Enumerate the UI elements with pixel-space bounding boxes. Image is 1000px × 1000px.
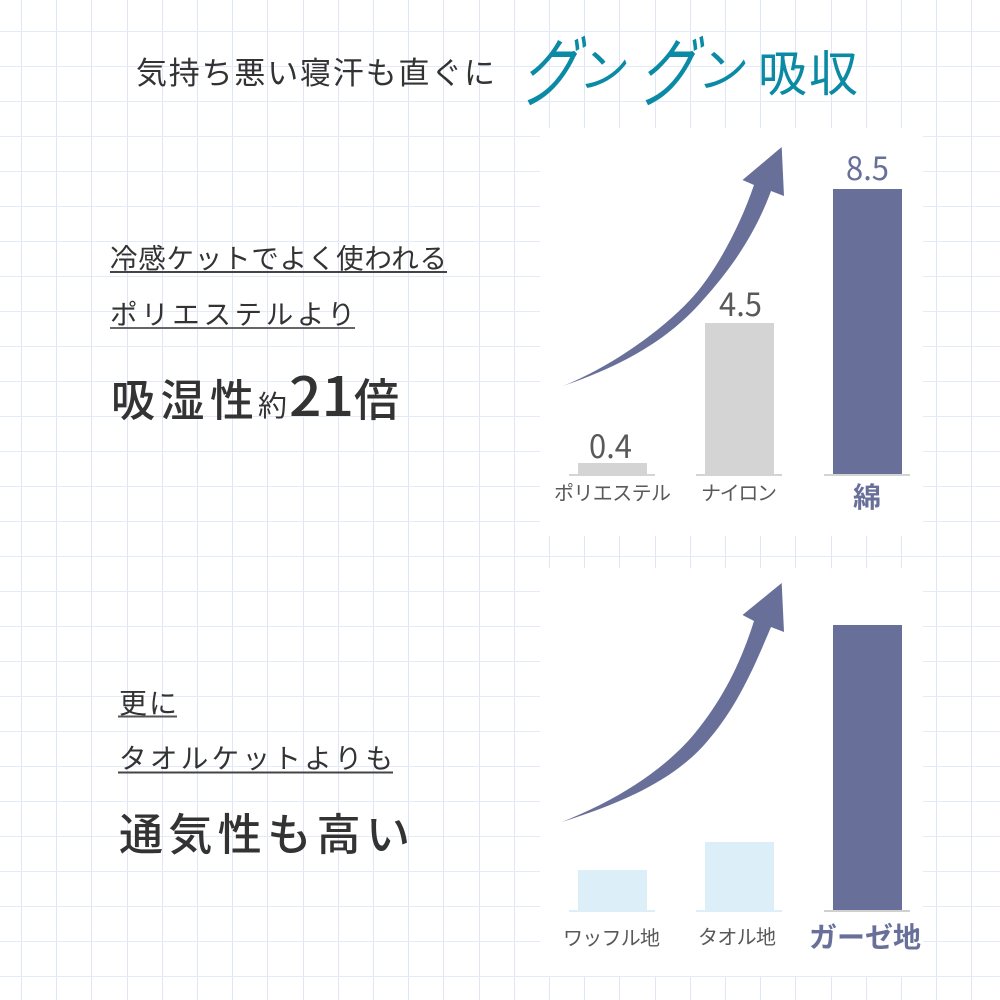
bar: ナイロン 4.5: ナイロン (701, 477, 777, 506)
title emphasis: グングン吸収: グ (631, 11, 716, 123)
bar: ナイロン 4.5: 4.5 (719, 280, 762, 326)
title emphasis: グングン吸収: 吸収 (758, 35, 858, 106)
title emphasis: グングン吸収 (513, 11, 858, 123)
headline: 吸湿性約21倍: 吸湿性 (111, 365, 254, 429)
bar: 綿 8.5 (824, 144, 910, 516)
panel: breathability chart (540, 568, 923, 976)
text block: breathability (118, 682, 410, 863)
bar: ポリエステル 0.4: 0.4 (589, 422, 632, 468)
bar: ポリエステル 0.4 (554, 422, 671, 506)
headline: 吸湿性約21倍: 21 (289, 353, 354, 432)
bar: ガーゼ地 (809, 625, 921, 956)
line: 冷感ケットでよく使われる: 冷感ケットでよく使われる (110, 236, 447, 276)
line: タオルケットよりも: タオルケットよりも (119, 736, 393, 776)
title (136, 11, 858, 123)
headline: 通気性も高い: 通気性も高い (119, 799, 410, 863)
headline: 吸湿性約21倍: 倍 (354, 364, 399, 429)
arrow: rising curve (563, 147, 784, 386)
bar: ナイロン 4.5 (696, 280, 782, 506)
bar: ワッフル地 (563, 870, 660, 951)
bar: タオル地 (696, 842, 782, 950)
text block: moisture absorption (110, 236, 447, 432)
arrow: rising curve (562, 583, 784, 822)
bar: ワッフル地: ワッフル地 (563, 922, 660, 951)
headline: 吸湿性約21倍 (111, 353, 399, 432)
bar: ガーゼ地: ガーゼ地 (809, 916, 921, 956)
line: 更に: 更に (119, 682, 177, 722)
title lead text: 気持ち悪い寝汗も直ぐに (136, 48, 495, 93)
bar: ポリエステル 0.4: ポリエステル (554, 477, 671, 506)
line: ポリエステルより: ポリエステルより (110, 292, 355, 332)
bar: タオル地: タオル地 (698, 921, 776, 950)
title emphasis: グングン吸収: ン (576, 31, 636, 101)
panel: absorption chart (540, 128, 923, 536)
bar: 綿 8.5: 8.5 (846, 144, 889, 190)
title emphasis: グングン吸収: ン (695, 31, 755, 101)
headline: 吸湿性約21倍: 約 (258, 383, 287, 425)
bar: 綿 8.5: 綿 (853, 476, 881, 516)
title emphasis: グングン吸収: グ (513, 11, 598, 123)
